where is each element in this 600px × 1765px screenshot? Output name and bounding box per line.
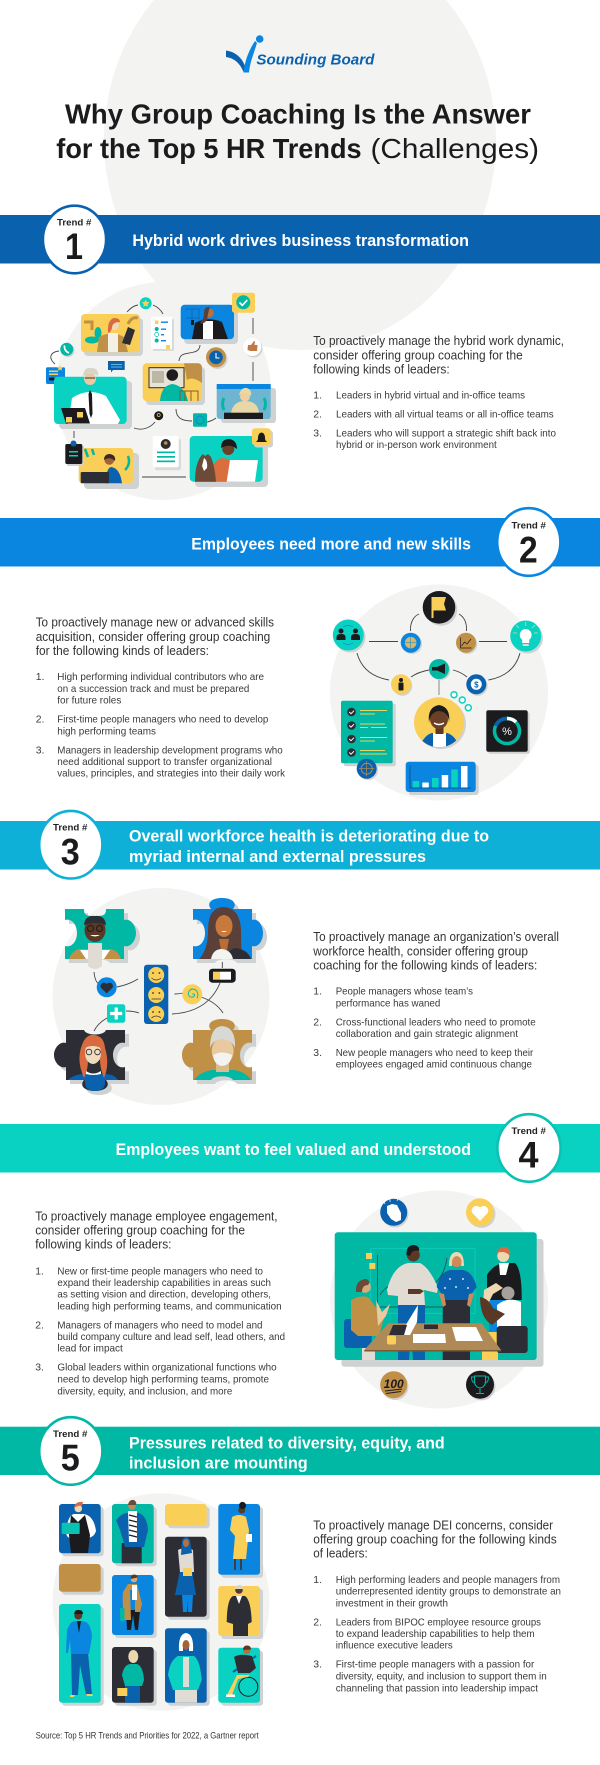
intro and list: trend 4: lead for impact — [57, 1344, 123, 1355]
panel: mood emoji scale — [144, 965, 168, 1024]
intro and list: trend 4 — [35, 1210, 285, 1397]
tile: man in blue suit — [59, 1604, 101, 1703]
intro and list: trend 3: performance has waned — [336, 998, 440, 1009]
intro and list: trend 4: build company culture and lead self, lead others, and — [57, 1332, 285, 1343]
icon: star — [140, 297, 152, 309]
person: standing woman in blue shirt — [437, 1252, 477, 1360]
icon: three small badges — [451, 692, 471, 711]
trend 1 banner: Hybrid work drives business transformation — [132, 232, 469, 250]
connector lines — [51, 305, 253, 477]
icon: dollar badge: $ — [474, 680, 479, 689]
intro and list: trend 4: following kinds of leaders: — [35, 1238, 172, 1252]
intro and list: trend 5: diversity, equity, and inclusion to support them in — [336, 1671, 547, 1682]
trend 2 banner — [0, 508, 600, 576]
intro and list: trend 4: New or first-time people managers who need to — [57, 1266, 263, 1277]
intro and list: trend 2: To proactively manage new or advanced skills — [36, 616, 274, 630]
trend 1 banner — [0, 206, 600, 273]
intro and list: trend 1: consider offering group coaching for the — [313, 348, 523, 362]
title: Why Group Coaching Is the Answer — [65, 98, 531, 129]
tile: blonde woman with folder — [112, 1647, 154, 1703]
intro and list: trend 5: of leaders: — [313, 1547, 368, 1561]
intro and list: trend 3: 1. — [313, 987, 322, 998]
tile: woman in yellow dress — [218, 1502, 260, 1575]
person: clapping man in black jacket — [483, 1247, 522, 1345]
connector lines — [357, 614, 520, 695]
icon: check badge — [232, 293, 255, 313]
intro and list: trend 1: To proactively manage the hybrid work dynamic, — [313, 334, 564, 348]
intro and list: trend 3: To proactively manage an organization’s overall — [313, 930, 559, 944]
logo: Sounding Board: Sounding Board — [256, 52, 376, 68]
intro and list: trend 4: To proactively manage employee engagement, — [35, 1210, 278, 1224]
icon: flag — [423, 591, 457, 626]
intro and list: trend 5: High performing leaders and people managers from — [336, 1575, 560, 1586]
icon: growth chart — [456, 633, 477, 654]
intro and list: trend 2: Managers in leadership development programs who — [57, 745, 283, 756]
tile: man with striped scarf — [112, 1500, 154, 1563]
tile: man with headscarf — [165, 1628, 207, 1703]
intro and list: trend 2: acquisition, consider offering group coaching — [36, 630, 270, 644]
tile: woman on video call — [181, 305, 238, 344]
panel: meeting scene — [335, 1232, 544, 1367]
intro and list: trend 2: for future roles — [57, 696, 121, 707]
tile: woman with cat and laptop — [190, 436, 268, 487]
tile: gold blank — [59, 1564, 101, 1592]
logo: Sounding Board — [226, 35, 376, 72]
title — [56, 98, 539, 164]
trend 3 banner — [0, 811, 600, 878]
intro and list: trend 3: workforce health, consider offering group — [312, 944, 528, 958]
trend 1 banner: Trend # — [57, 218, 92, 229]
illustration: skills network — [330, 584, 548, 800]
trend 4 banner — [0, 1114, 600, 1182]
intro and list: trend 2: need additional support to transfer organizational — [57, 757, 272, 768]
icon: dollar badge — [466, 674, 488, 696]
intro and list: trend 2: high performing teams — [57, 726, 156, 737]
intro and list: trend 2: 3. — [36, 745, 44, 756]
meeting table — [364, 1305, 501, 1352]
icon: question mark — [154, 411, 163, 420]
intro and list: trend 4: Managers of managers who need to model and — [57, 1320, 263, 1331]
trend 2 banner: Employees need more and new skills — [191, 535, 471, 553]
intro and list: trend 1: Leaders with all virtual teams or all in-office teams — [336, 409, 554, 420]
intro and list: trend 2 — [36, 616, 286, 780]
puzzle: older man with beard — [182, 1019, 256, 1084]
panel: green checklist — [341, 701, 396, 766]
intro and list: trend 3: employees engaged amid continuous change — [336, 1060, 532, 1071]
intro and list: trend 2: 1. — [36, 672, 44, 683]
illustration: workforce health puzzle pieces — [52, 888, 270, 1105]
puzzle: man with glasses — [65, 909, 140, 969]
intro and list: trend 1 — [313, 334, 564, 451]
intro and list: trend 5: influence executive leaders — [336, 1641, 453, 1652]
intro and list: trend 5 — [313, 1518, 561, 1694]
intro and list: trend 3: 3. — [313, 1048, 322, 1059]
puzzle: woman with long hair — [193, 898, 267, 963]
icon: globe — [401, 633, 422, 654]
icon: blue card — [46, 365, 65, 384]
icon: people exchange — [333, 620, 366, 652]
trend 3 banner: Trend # — [53, 823, 88, 834]
intro and list: trend 4: diversity, equity, and inclusion, and more — [57, 1386, 232, 1397]
intro and list: trend 5: 3. — [313, 1660, 322, 1671]
source note: Source: Top 5 HR Trends and Priorities for 2022, a Gartner report — [36, 1730, 259, 1741]
icon: battery — [209, 969, 236, 983]
intro and list: trend 5: 2. — [313, 1617, 322, 1628]
intro and list: trend 4: expand their leadership capabilities in areas such — [57, 1278, 271, 1289]
trend 5 banner: Pressures related to diversity, equity, and — [129, 1434, 445, 1452]
connector lines — [94, 962, 223, 1031]
intro and list: trend 5: offering group coaching for the following kinds — [313, 1533, 557, 1547]
intro and list: trend 5: channeling that passion into leadership impact — [336, 1683, 538, 1694]
intro and list: trend 2: values, principles, and strategies into their daily work — [57, 769, 286, 780]
intro and list: trend 4: Global leaders within organizational functions who — [57, 1363, 277, 1374]
icon: clapping hands — [380, 1198, 408, 1228]
icon: progress ring — [193, 413, 207, 427]
intro and list: trend 5: to expand leadership capabilities to help them — [336, 1629, 535, 1640]
intro and list: trend 3: Cross-functional leaders who need to promote — [336, 1017, 536, 1028]
intro and list: trend 5: investment in their growth — [336, 1598, 448, 1609]
intro and list: trend 1: 3. — [313, 428, 322, 439]
trend 1 banner: 1 — [65, 226, 83, 267]
title: for the Top 5 HR Trends — [56, 133, 362, 164]
intro and list: trend 5: underrepresented identity groups to demonstrate an — [336, 1587, 561, 1598]
intro and list: trend 4: consider offering group coaching for the — [35, 1224, 245, 1238]
trend 3 banner: 3 — [61, 832, 80, 872]
intro and list: trend 3: People managers whose team’s — [336, 987, 473, 998]
intro and list: trend 3: collaboration and gain strategic alignment — [336, 1029, 518, 1040]
icon: trophy — [466, 1371, 496, 1400]
illustration: team meeting — [330, 1190, 548, 1408]
icon: 100 score — [380, 1371, 408, 1400]
tile: man with laptop — [59, 1502, 101, 1553]
trend 3 banner: Overall workforce health is deteriorating due to — [129, 828, 489, 846]
intro and list: trend 1: 1. — [313, 391, 322, 402]
intro and list: trend 3 — [312, 930, 559, 1071]
avatar: smiling woman — [414, 697, 466, 749]
icon: profile document — [153, 436, 181, 470]
person: seated right — [480, 1286, 528, 1360]
tile: older man in dark suit — [218, 1585, 260, 1636]
intro and list: trend 3: New people managers who need to keep their — [336, 1048, 534, 1059]
icon: bell — [252, 428, 273, 448]
intro and list: trend 1: Leaders in hybrid virtual and in-office teams — [336, 391, 525, 402]
icon: light bulb — [510, 620, 543, 654]
intro and list: trend 1: 2. — [313, 409, 322, 420]
tile: person at desktop monitor — [143, 363, 205, 405]
trend 2 banner: Trend # — [512, 520, 547, 531]
icon: phone — [60, 343, 74, 357]
intro and list: trend 1: hybrid or in-person work environment — [336, 440, 497, 451]
icon: spiral — [182, 984, 202, 1004]
icon: plus — [107, 1004, 125, 1023]
intro and list: trend 4: 3. — [35, 1363, 44, 1374]
person: seated left — [344, 1279, 390, 1360]
panel: percent donut — [486, 710, 530, 754]
panel: bar chart — [406, 762, 479, 795]
intro and list: trend 4: as setting vision and direction, developing others, — [57, 1290, 271, 1301]
intro and list: trend 4: leading high performing teams, and communication — [57, 1302, 282, 1313]
icon: heart — [466, 1198, 496, 1228]
icon: 100 score: 100 — [384, 1377, 404, 1391]
icon: checklist document — [151, 317, 174, 351]
intro and list: trend 2: for the following kinds of leaders: — [36, 644, 209, 658]
intro and list: trend 3: coaching for the following kinds of leaders: — [313, 958, 537, 972]
tile: man in wheelchair — [218, 1646, 260, 1703]
icon: thumbs up — [243, 338, 262, 358]
intro and list: trend 5: First-time people managers with a passion for — [336, 1660, 535, 1671]
icon: target — [357, 759, 378, 780]
intro and list: trend 3: 2. — [313, 1017, 322, 1028]
icon: heart — [97, 977, 117, 997]
tile: woman with tablet — [81, 314, 143, 356]
puzzle: woman with red hair — [54, 1030, 129, 1095]
intro and list: trend 4: 2. — [35, 1320, 44, 1331]
trend 5 banner: 5 — [61, 1438, 80, 1478]
intro and list: trend 2: 2. — [36, 714, 44, 725]
person: standing man in sweater — [387, 1245, 438, 1360]
trend 3 banner: myriad internal and external pressures — [129, 848, 426, 866]
tile: man with laptop — [54, 368, 132, 429]
trend 4 banner: 4 — [518, 1134, 539, 1176]
trend 4 banner: Trend # — [512, 1126, 547, 1137]
icon: black clipboard — [65, 440, 84, 466]
panel: percent donut: % — [502, 726, 512, 738]
intro and list: trend 5: 1. — [313, 1575, 322, 1586]
trend 5 banner: inclusion are mounting — [129, 1454, 308, 1472]
illustration: diverse people tiles — [52, 1493, 270, 1711]
tile: yellow blank — [165, 1504, 207, 1525]
tile: woman in tan coat — [112, 1574, 154, 1635]
intro and list: trend 4: need to develop high performing teams, promote — [57, 1374, 269, 1385]
icon: clock — [206, 347, 228, 369]
icon: chat bubble — [108, 361, 125, 372]
trend 2 banner: 2 — [519, 529, 538, 570]
tile: woman with laptop on yellow — [79, 448, 139, 489]
trend 5 banner: Trend # — [53, 1429, 88, 1440]
intro and list: trend 2: High performing individual contributors who are — [57, 672, 264, 683]
intro and list: trend 5: To proactively manage DEI concerns, consider — [313, 1518, 553, 1532]
intro and list: trend 1: following kinds of leaders: — [313, 362, 450, 376]
illustration: hybrid work video tiles — [46, 282, 276, 500]
intro and list: trend 5: Leaders from BIPOC employee resource groups — [336, 1617, 541, 1628]
intro and list: trend 4: 1. — [35, 1266, 44, 1277]
icon: person with arrows — [391, 674, 412, 696]
tile: woman in hijab — [165, 1537, 207, 1617]
tile: blonde woman at desk — [217, 384, 276, 423]
tile shadows — [62, 1507, 263, 1706]
trend 4 banner: Employees want to feel valued and understood — [116, 1141, 471, 1159]
intro and list: trend 2: First-time people managers who need to develop — [57, 714, 268, 725]
header background circle — [104, 0, 496, 350]
icon: megaphone — [429, 659, 450, 680]
trend 5 banner — [0, 1417, 600, 1485]
title: (Challenges) — [370, 133, 539, 164]
intro and list: trend 1: Leaders who will support a strategic shift back into — [336, 428, 556, 439]
intro and list: trend 2: on a succession track and must be prepared — [57, 684, 250, 695]
